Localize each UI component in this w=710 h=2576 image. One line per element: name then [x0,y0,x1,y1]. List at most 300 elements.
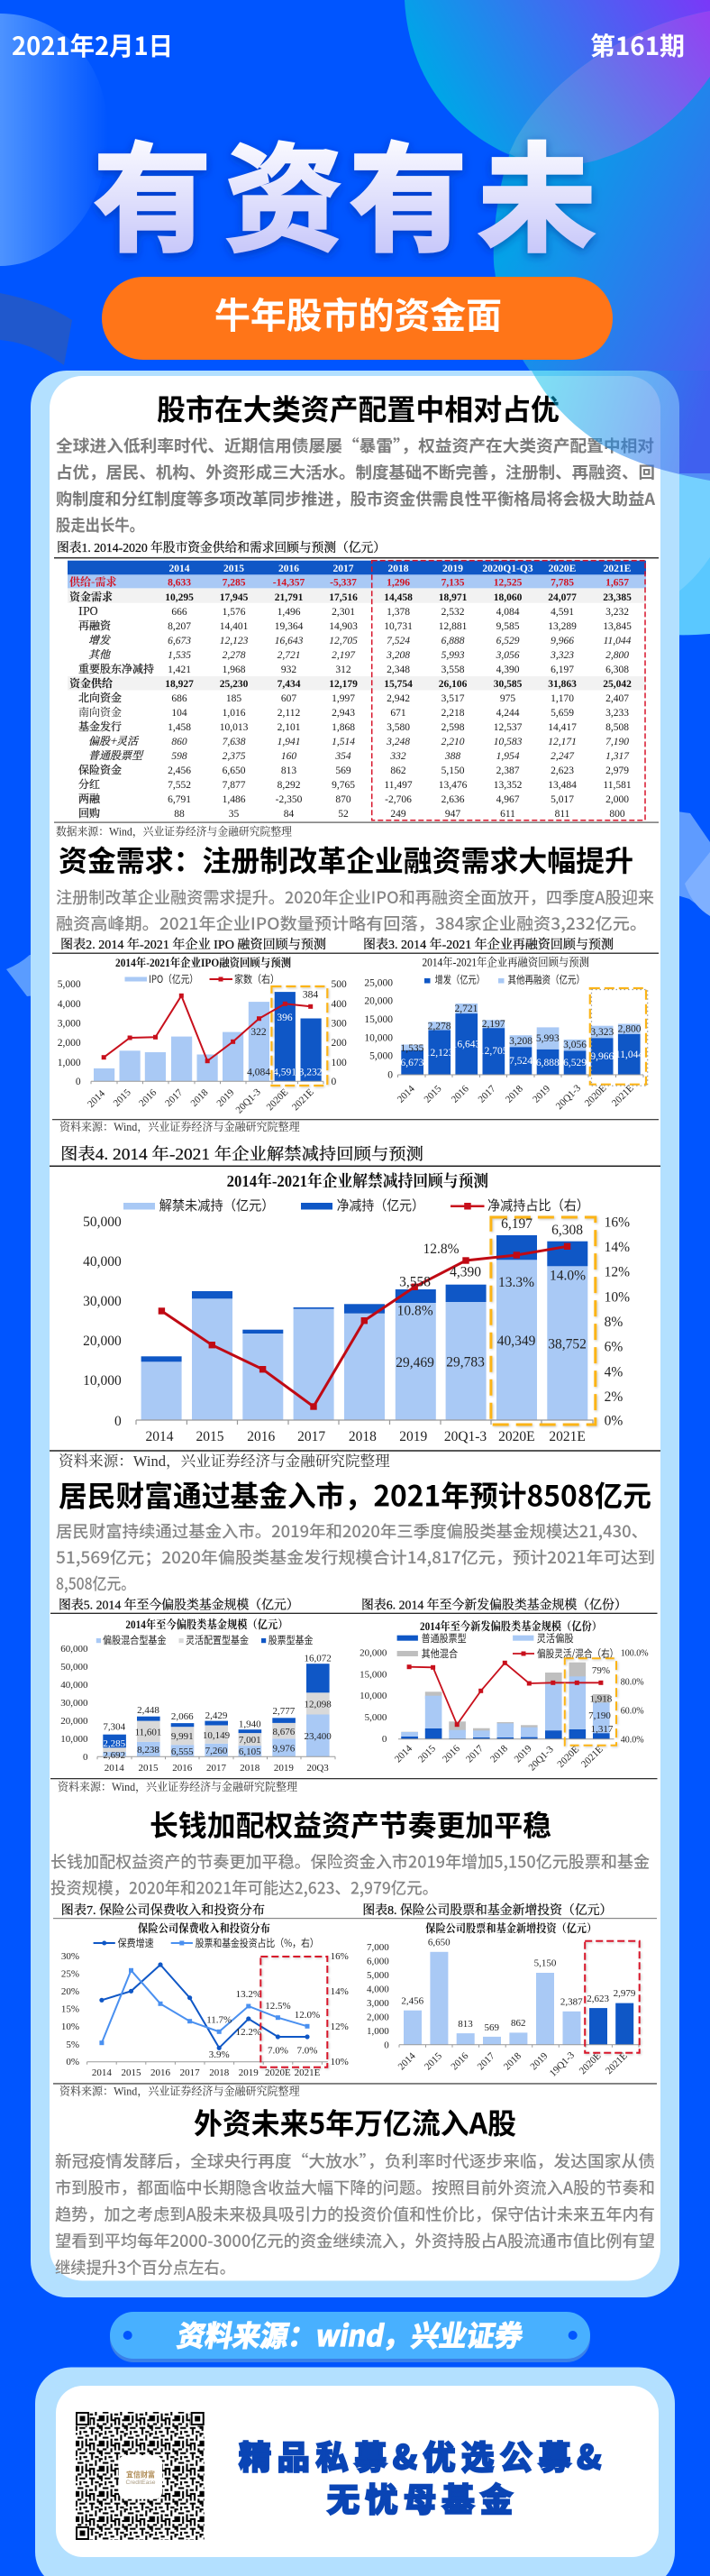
chart 3: refinancing: 12,123 [425,1048,454,1059]
table: supply and demand: 3,208 [386,650,410,661]
chart 8: insurance equity investment: 2,456 [401,1996,424,2007]
table: supply and demand: 185 [226,693,241,704]
table: supply and demand: -2,350 [276,794,303,805]
table: supply and demand: 2,000 [605,794,629,805]
table: supply and demand: 2,407 [605,693,629,704]
table: supply and demand: 7,285 [223,577,246,588]
table: supply and demand: 4,591 [551,607,574,618]
chart 8: insurance equity investment: 6,000 [367,1957,389,1967]
table: supply and demand: 569 [335,765,351,776]
table: supply and demand: 2,247 [551,751,575,762]
chart 8: insurance equity investment: 2021E [604,2050,630,2076]
table: supply and demand: 6,791 [168,794,191,805]
table: supply and demand: 2,721 [278,650,300,661]
table: supply and demand: 1,486 [223,794,246,805]
chart 2: IPO financing: 3,232 [299,1068,323,1078]
chart 5: equity fund size: 20,000 [60,1716,88,1727]
chart 4: lock-up expiry and net reduction: 12.8% [423,1242,460,1257]
table: supply and demand: 10,583 [494,737,523,747]
section: household wealth [50,1473,658,1793]
section: long-term capital [50,1803,657,2097]
chart 2: IPO financing: 20Q1-3 [234,1086,263,1115]
text block: 居民财富持续通过基金入市。2019年和2020年三季度偏股类基金规模达21,430、 [56,1519,648,1543]
table: supply and demand: 7,434 [278,679,301,690]
heading: 居民财富通过基金入市，2021年预计8508亿元 [59,1473,651,1515]
chart 2: IPO financing: 2018 [188,1087,211,1109]
chart 7: premium income and investment share: 10% [61,2021,79,2032]
chart 4: lock-up expiry and net reduction: 29,469 [396,1355,434,1371]
table: supply and demand: 1,296 [387,577,410,588]
table: supply and demand: 2016 [278,564,299,574]
table: supply and demand: 25,230 [220,679,249,690]
table: supply and demand: 2,532 [441,607,465,618]
chart 4: lock-up expiry and net reduction: 0% [605,1414,623,1429]
table: supply and demand: 312 [335,665,351,675]
chart 6: new equity funds: 79% [592,1665,610,1676]
chart 4: lock-up expiry and net reduction: 2018 [349,1429,377,1444]
table: supply and demand: 2,278 [223,650,246,661]
chart 8: insurance equity investment [367,1921,640,2079]
chart 2: IPO financing: IPO（亿元） [149,972,198,986]
chart 7: premium income and investment share: 16% [331,1951,349,1962]
table: supply and demand: 7,552 [168,780,191,791]
chart 5: equity fund size [60,1618,335,1774]
source pill: 资料来源：wind，兴业证券 [174,2314,526,2355]
chart 4: lock-up expiry and net reduction: 50,000 [83,1215,122,1230]
table: supply and demand: 1,535 [168,650,191,661]
chart 6: new equity funds: 2016 [441,1743,462,1765]
table: supply and demand: 9,765 [332,780,355,791]
table: supply and demand: 24,077 [548,592,577,603]
text block: 8,508亿元。 [56,1572,135,1595]
table: supply and demand: 4,967 [496,794,520,805]
main title: 有 [94,105,211,275]
text block [50,1850,650,1899]
icon: pill hole right [569,2331,578,2340]
table: supply and demand: 1,657 [605,577,629,588]
chart 4: lock-up expiry and net reduction: 10.8% [397,1304,433,1318]
table: supply and demand: IPO [78,603,98,619]
table: supply and demand: 北向资金 [78,690,122,705]
table: supply and demand: 3,233 [605,708,629,719]
issue number: 第161期 [590,27,685,63]
text block: 市到股市，都面临中长期隐含收益大幅下降的问题。按照目前外资流入A股的节奏和 [55,2176,655,2199]
chart 5: equity fund size: 23,400 [304,1731,332,1742]
table: supply and demand: 2019 [442,564,463,574]
chart 5: equity fund size: 8,238 [137,1745,159,1756]
chart 5: equity fund size: 10,149 [203,1730,231,1741]
chart 8: insurance equity investment: 7,000 [367,1942,389,1953]
chart 6: new equity funds: 其他混合 [422,1646,459,1661]
text block: 长钱加配权益资产的节奏更加平稳。保险资金入市2019年增加5,150亿元股票和基金 [50,1850,650,1874]
chart 4: lock-up expiry and net reduction: 16% [605,1215,630,1230]
chart 2: IPO financing: 3,000 [58,1019,81,1030]
chart 4: lock-up expiry and net reduction: 12% [605,1265,630,1280]
chart 2: IPO financing: 400 [332,999,347,1010]
chart 5: equity fund size: 9,991 [171,1731,194,1742]
table: supply and demand: 14,903 [329,621,358,632]
source note: 资料来源：Wind，兴业证券经济与金融研究院整理 [59,2084,300,2097]
table: supply and demand: 800 [609,809,625,820]
table: supply and demand: 保险资金 [78,762,122,777]
chart 4: lock-up expiry and net reduction: 40,000 [83,1254,122,1270]
chart 6: new equity funds: 2020E [555,1744,581,1770]
chart 5: equity fund size: 2,777 [273,1706,296,1717]
table: supply and demand: 932 [281,665,296,675]
table: supply and demand: 3,323 [550,650,574,661]
table: supply and demand: 1,317 [605,751,630,762]
chart 5: equity fund size: 2014 [105,1763,124,1774]
table: supply and demand: 偏股+灵活 [88,733,140,748]
chart 8: insurance equity investment: 2020E [578,2050,604,2076]
chart 7: premium income and investment share: 2018 [209,2067,230,2078]
table caption: 图表1. 2014-2020 年股市资金供给和需求回顾与预测（亿元） [57,540,386,555]
chart 3: refinancing: 15,000 [364,1014,393,1025]
chart 6: new equity funds: 普通股票型 [422,1631,467,1646]
table: supply and demand: 普通股票型 [88,747,144,763]
table: supply and demand: 2,375 [223,751,246,762]
chart 6: new equity funds: 2017 [464,1743,486,1765]
table: supply and demand: 25,042 [603,679,632,690]
table: supply and demand: 870 [335,794,351,805]
text block: 继续提升3个百分点左右。 [55,2256,235,2279]
table: supply and demand: -14,357 [273,577,305,588]
chart 7: premium income and investment share: 7.0% [268,2045,288,2056]
table: supply and demand: 13,845 [603,621,632,632]
table: supply and demand: 6,197 [551,665,574,675]
table: supply and demand: 12,171 [548,737,577,747]
chart 7: premium income and investment share: 2017 [180,2067,200,2078]
chart 3: refinancing: 3,056 [563,1040,587,1050]
table: supply and demand: 1,016 [223,708,246,719]
table: supply and demand: 3,056 [496,650,520,661]
subtitle pill: 牛年股市的资金面 [214,287,502,339]
chart 8: insurance equity investment: 2,623 [587,1994,609,2004]
text block: 51,569亿元；2020年偏股类基金发行规模合计14,817亿元，预计2021年可达到 [56,1545,655,1569]
chart 5: equity fund size: 60,000 [60,1644,88,1655]
chart 2: IPO financing: 2020E [265,1086,291,1113]
chart 2: IPO financing: 2015 [112,1086,133,1109]
text block: 趋势，加之考虑到A股未来极具吸引力的投资价值和性价比，保守估计未来五年内有 [55,2202,655,2225]
chart 3: refinancing: 6,888 [536,1058,560,1068]
caption: chart 5: 图表5. 2014 年至今偏股类基金规模（亿元） [59,1598,299,1612]
chart 7: premium income and investment share: 2016 [150,2067,171,2078]
table: supply and demand: 5,017 [551,794,574,805]
table: supply and demand: 18,060 [494,592,523,603]
chart 3: refinancing: 2014年-2021年企业再融资回顾与预测 [422,956,589,969]
chart 2: IPO financing: 300 [332,1019,347,1030]
chart 7: premium income and investment share: 保费增速 [118,1936,154,1950]
chart 3: refinancing: 2016 [450,1083,471,1105]
chart 5: equity fund size: 50,000 [60,1662,88,1673]
table: supply and demand: 10,295 [165,592,194,603]
table: supply and demand: 598 [171,751,187,762]
chart 2: IPO financing: 100 [332,1058,347,1068]
chart 2: IPO financing: 2,000 [58,1038,81,1049]
chart 6: new equity funds: 2014年至今新发偏股类基金规模（亿份） [420,1619,602,1633]
heading: 资金需求：注册制改革企业融资需求大幅提升 [59,839,633,880]
section: financing demand [52,839,659,1133]
chart 5: equity fund size: 20Q3 [306,1763,329,1774]
table: supply and demand: 8,508 [605,722,629,733]
chart 6: new equity funds: 1,918 [590,1693,613,1704]
table: supply and demand: 1,514 [332,737,355,747]
table: supply and demand: 21,791 [275,592,304,603]
chart 5: equity fund size: 8,676 [273,1727,296,1737]
table: supply and demand: 3,232 [605,607,629,618]
chart 5: equity fund size: 2,285 [103,1738,126,1749]
table: supply and demand: 2,456 [168,765,191,776]
table: supply and demand: 3,580 [387,722,410,733]
chart 6: new equity funds: 1,317 [591,1724,614,1735]
table: supply and demand: 2,943 [332,708,355,719]
table: supply and demand: 7,877 [223,780,246,791]
table: supply and demand: 2017 [333,564,354,574]
chart 7: premium income and investment share: 0% [66,2057,79,2067]
chart 2: IPO financing: 4,591 [273,1068,296,1078]
chart 6: new equity funds: 偏股灵活/混合（右） [537,1646,618,1661]
table: supply and demand: 9,966 [551,636,574,646]
text block: 望看到平均每年2000-3000亿元的资金继续流入，外资持股占A股流通市值比例有望 [55,2229,655,2252]
chart 5: equity fund size: 2014年至今偏股类基金规模（亿元） [125,1618,288,1631]
source pill [110,2312,590,2362]
table: supply and demand: 两融 [78,791,101,806]
source note: 资料来源：Wind，兴业证券经济与金融研究院整理 [59,1120,300,1133]
chart 8: insurance equity investment: 2,979 [614,1988,636,1999]
chart 8: insurance equity investment: 3,000 [367,1998,389,2009]
chart 3: refinancing: 7,524 [509,1056,532,1067]
text block [56,434,655,536]
panel: content card [31,371,679,2297]
chart 4: lock-up expiry and net reduction: 净减持占比（右） [487,1196,589,1215]
chart 8: insurance equity investment: 813 [458,2019,473,2030]
chart 7: premium income and investment share: 15% [61,2003,79,2014]
chart 8: insurance equity investment: 2014 [396,2050,418,2072]
chart 6: new equity funds: 2021E [579,1744,605,1770]
chart 7: premium income and investment share: 12.2% [236,2027,261,2038]
chart 7: premium income and investment share [61,1921,349,2078]
chart 5: equity fund size: 7,001 [239,1735,261,1746]
table: supply and demand: 5,150 [441,765,465,776]
table: supply and demand: 88 [174,809,185,820]
chart 4: lock-up expiry and net reduction: 2021E [549,1429,586,1444]
table: supply and demand: 4,084 [496,607,520,618]
chart 5: equity fund size: 2,066 [171,1711,194,1722]
chart 3: refinancing: 2018 [504,1083,525,1105]
footer slogan [239,2432,601,2521]
chart 8: insurance equity investment: 5,000 [367,1970,389,1981]
chart 2: IPO financing: 2014年-2021年企业IPO融资回顾与预测 [115,956,291,969]
chart 6: new equity funds: 10,000 [360,1691,387,1701]
table: supply and demand: 基金发行 [78,719,122,734]
table: supply and demand: 249 [390,809,406,820]
text block [55,2150,655,2279]
chart 5: equity fund size: 0 [83,1752,88,1763]
QR code: 宜信财富 [126,2469,155,2480]
heading: 外资未来5年万亿流入A股 [194,2101,516,2142]
table: supply and demand: 35 [229,809,240,820]
table: supply and demand: 重要股东净减持 [78,661,154,676]
panel: footer card [35,2368,675,2576]
table: supply and demand: 18,927 [165,679,194,690]
table: supply and demand: 6,529 [496,636,520,646]
chart 4: lock-up expiry and net reduction: 2020E [498,1429,535,1444]
caption: chart 8: 图表8. 保险公司股票和基金新增投资（亿元） [362,1902,612,1918]
table: supply and demand: 2,301 [332,607,355,618]
source note: 资料来源：Wind，兴业证券经济与金融研究院整理 [59,1453,390,1470]
chart 7: premium income and investment share: 12.5% [265,2001,291,2012]
chart 2: IPO financing: 4,084 [247,1068,270,1078]
chart 5: equity fund size: 7,260 [205,1746,228,1756]
table: supply and demand [68,561,646,820]
chart 5: equity fund size: 股票型基金 [269,1633,314,1647]
main title: 资 [225,105,342,275]
chart 7: premium income and investment share: 5% [66,2040,79,2050]
table: supply and demand: 6,650 [223,765,246,776]
chart 5: equity fund size: 7,304 [103,1722,126,1733]
chart 3: refinancing: 12,705 [479,1046,508,1057]
main title: 未 [478,105,596,275]
chart 6: new equity funds: 60.0% [621,1706,644,1717]
chart 4: lock-up expiry and net reduction: 20,000 [83,1334,122,1349]
table: supply and demand: 2,623 [551,765,574,776]
chart 8: insurance equity investment: 保险公司股票和基金新增投资（亿元） [425,1921,596,1935]
chart 5: equity fund size: 2017 [206,1763,227,1774]
table: supply and demand: 17,945 [220,592,249,603]
table: supply and demand: 1,954 [496,751,520,762]
chart 6: new equity funds: 2015 [416,1743,438,1765]
chart 2: IPO financing: 4,000 [58,999,81,1010]
table: supply and demand: 30,585 [494,679,523,690]
table: supply and demand: 2,598 [441,722,465,733]
table: supply and demand: 11,497 [384,780,413,791]
chart 4: lock-up expiry and net reduction: 2% [605,1389,623,1405]
chart 6: new equity funds: 7,190 [588,1710,611,1721]
table: supply and demand: 52 [338,809,349,820]
table: supply and demand: 1,170 [551,693,574,704]
table: supply and demand: 6,673 [168,636,191,646]
chart 8: insurance equity investment: 1,000 [367,2026,389,2037]
chart 4: lock-up expiry and net reduction: 2014年-2021年企业解禁减持回顾与预测 [227,1171,488,1190]
chart 4: lock-up expiry and net reduction: 6,197 [501,1216,532,1232]
table: supply and demand: 332 [389,751,406,762]
chart 2: IPO financing: 322 [250,1027,267,1038]
text block: 占优，居民、机构、外资形成三大活水。制度基础不断完善，注册制、再融资、回 [56,460,655,483]
chart 4: lock-up expiry and net reduction: 29,783 [446,1354,485,1371]
chart 5: equity fund size: 偏股混合型基金 [103,1633,167,1647]
chart 6: new equity funds: 5,000 [365,1712,387,1723]
chart 2: IPO financing [58,956,347,1115]
table: supply and demand: 增发 [88,632,112,647]
chart 4: lock-up expiry and net reduction: 4,390 [450,1264,481,1280]
table: supply and demand: 1,576 [223,607,246,618]
table: supply and demand: 13,352 [494,780,523,791]
chart 8: insurance equity investment: 2018 [502,2050,523,2072]
table: supply and demand: 11,581 [603,780,632,791]
chart 3: refinancing: 2015 [423,1083,444,1105]
chart 7: premium income and investment share: 3.9% [209,2049,230,2060]
table: supply and demand: 3,248 [386,737,410,747]
chart 3: refinancing: 2,197 [482,1019,505,1030]
table: supply and demand: 2,942 [387,693,410,704]
chart 3: refinancing: 2020E [583,1083,609,1109]
table: supply and demand: 14,458 [384,592,413,603]
QR code: CreditEase [126,2480,156,2486]
table: supply and demand: 26,106 [439,679,468,690]
table: supply and demand: 3,558 [441,665,465,675]
chart 7: premium income and investment share: 14% [331,1986,349,1997]
chart 3: refinancing: 2,278 [428,1021,451,1031]
table: supply and demand: 分红 [78,776,100,792]
chart 2: IPO financing: 2017 [163,1087,186,1109]
caption: chart 3: 图表3. 2014 年-2021 年企业再融资回顾与预测 [363,937,614,952]
section: foreign capital [55,2101,655,2279]
table: supply and demand: 7,785 [551,577,574,588]
table: supply and demand: 12,705 [329,636,358,646]
chart 4: lock-up expiry and net reduction: 2014 [146,1429,174,1444]
text block: 融资高峰期。2021年企业IPO数量预计略有回落，384家企业融资3,232亿元。 [56,912,647,935]
chart 7: premium income and investment share: 2019 [239,2067,259,2078]
table: supply and demand: 7,638 [223,737,246,747]
table: supply and demand: 15,754 [384,679,413,690]
table: supply and demand: 4,390 [496,665,520,675]
table: supply and demand: 160 [281,751,296,762]
table: supply and demand: 资金需求 [69,589,113,604]
chart 4: lock-up expiry and net reduction [83,1171,630,1444]
chart 7: premium income and investment share: 股票和基金投资占比（%，右） [196,1936,319,1950]
table: supply and demand: 再融资 [78,618,112,633]
text block: 股走出长牛。 [56,513,144,536]
chart 5: equity fund size: 2015 [139,1763,159,1774]
table: supply and demand: 2,348 [387,665,410,675]
table: supply and demand: 南向资金 [78,704,122,720]
chart 5: equity fund size: 6,555 [171,1746,194,1757]
table: supply and demand: 1,968 [223,665,246,675]
table: supply and demand: 5,659 [551,708,574,719]
table: supply and demand: 813 [281,765,296,776]
chart 8: insurance equity investment: 5,150 [534,1958,557,1969]
table: supply and demand: 供给-需求 [69,573,116,590]
chart 4: lock-up expiry and net reduction: 40,349 [497,1334,536,1349]
chart 6: new equity funds: 2019 [513,1743,534,1765]
chart 2: IPO financing: 2014 [86,1088,107,1110]
table: supply and demand: 84 [284,809,294,820]
chart 7: premium income and investment share: 11.7% [206,2014,232,2025]
table: supply and demand: 14,417 [548,722,577,733]
table: supply and demand: 19,364 [275,621,304,632]
table: supply and demand: 5,993 [441,650,465,661]
caption: chart 7: 图表7. 保险公司保费收入和投资分布 [61,1902,265,1918]
chart 5: equity fund size: 16,072 [304,1654,332,1664]
chart 2: IPO financing: 500 [332,979,347,990]
chart 4: lock-up expiry and net reduction: 30,000 [83,1294,122,1309]
chart 3: refinancing: 2,721 [454,1004,478,1014]
table: supply and demand: 1,941 [278,737,300,747]
table: supply and demand: 2020E [549,564,577,574]
chart 4: lock-up expiry and net reduction: 13.3% [498,1275,534,1290]
chart 6: new equity funds: 40.0% [621,1735,644,1746]
chart 4: lock-up expiry and net reduction: 10% [605,1289,630,1305]
chart 3: refinancing: 2014 [396,1083,417,1105]
table: supply and demand: 8,207 [168,621,191,632]
caption: chart 2: 图表2. 2014 年-2021 年企业 IPO 融资回顾与预测 [60,937,326,952]
table: supply and demand: 975 [500,693,515,704]
table: supply and demand: 1,868 [332,722,355,733]
chart 5: equity fund size: 2,448 [137,1705,159,1716]
icon: pill hole left [123,2331,132,2340]
table: supply and demand: 104 [171,708,187,719]
table: supply and demand: 2,101 [278,722,301,733]
